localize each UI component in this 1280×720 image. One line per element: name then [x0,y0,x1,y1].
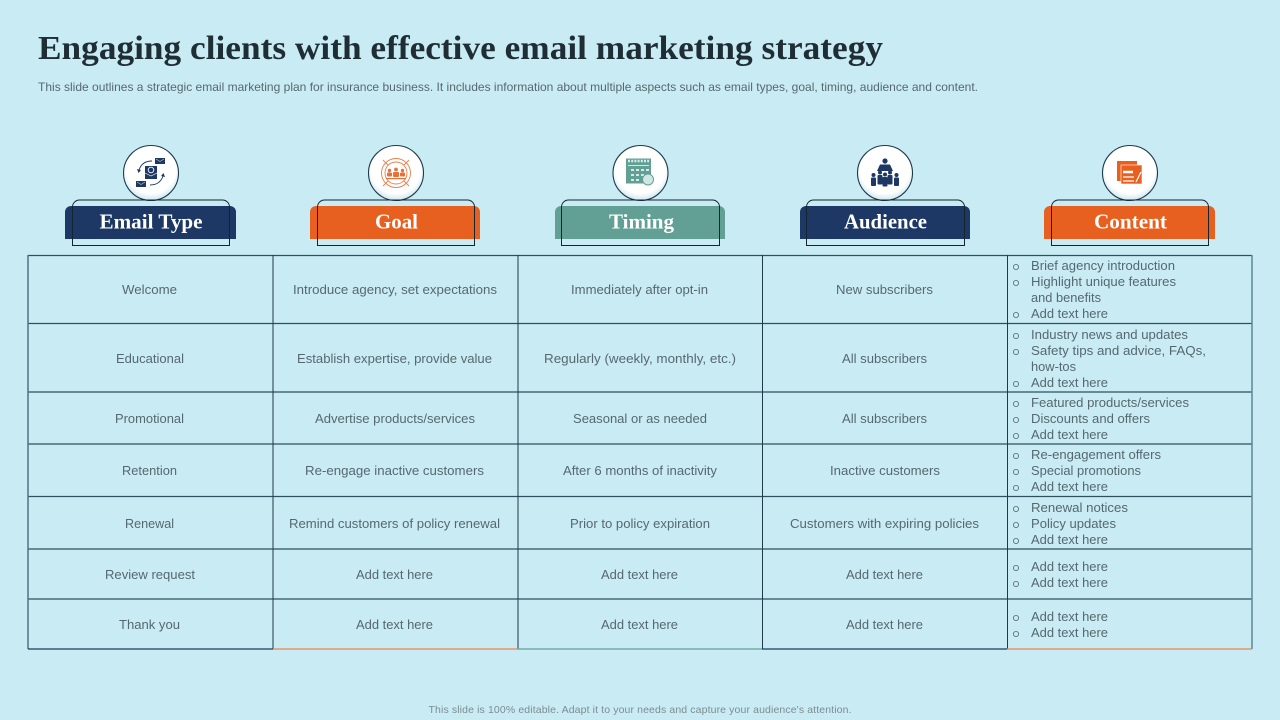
footer note: This slide is 100% editable. Adapt it to your needs and capture your audience's attention. [428,704,852,716]
icon: documents [1102,146,1158,200]
header: Goal [310,146,480,246]
row: Educational: Industry news and updates [1031,327,1188,342]
row: Review request: Review request [105,567,195,582]
header: Goal: Goal [375,210,418,234]
label pill [1044,206,1215,239]
row: Thank you: Add text here [1031,609,1108,624]
row: Renewal: Renewal [125,516,174,531]
header: Email Type: Email Type [100,210,202,234]
header: Audience: Audience [844,210,927,234]
row: Renewal [125,500,1129,547]
row: Welcome: Brief agency introduction [1031,258,1175,273]
row: Promotional [115,395,1190,442]
row: Educational [116,327,1206,390]
header: Timing: Timing [609,210,675,234]
row: Promotional: Discounts and offers [1031,411,1150,426]
row: Promotional: Promotional [115,411,184,426]
row: Renewal: Policy updates [1031,516,1116,531]
row: Promotional: All subscribers [842,411,927,426]
title: Engaging clients with effective email marketing strategy [38,30,883,67]
icon: calendar [613,146,668,200]
row: Welcome [122,258,1176,321]
row: Retention: Inactive customers [830,463,941,478]
row: Promotional: Add text here [1031,427,1108,442]
row: Retention [122,447,1161,494]
icon: email cycle [124,146,178,200]
header: Content: Content [1094,210,1167,234]
row: Educational: how-tos [1031,359,1076,374]
row: Welcome: Add text here [1031,306,1108,321]
header: Content [1044,146,1215,246]
row: Promotional: Advertise products/services [315,411,476,426]
row: Review request: Add text here [846,567,923,582]
row: Educational: Add text here [1031,375,1108,390]
label pill [65,206,236,239]
row: Promotional: Featured products/services [1031,395,1190,410]
row: Welcome: Introduce agency, set expectations [293,282,497,297]
row: Retention: Add text here [1031,479,1108,494]
row: Retention: Re-engagement offers [1031,447,1161,462]
row: Educational: All subscribers [842,351,927,366]
row: Retention: Re-engage inactive customers [305,463,485,478]
row: Retention: Retention [122,463,177,478]
row: Review request: Add text here [356,567,433,582]
row: Review request: Add text here [1031,575,1108,590]
row: Thank you: Add text here [846,617,923,632]
row: Educational: Establish expertise, provide value [297,351,492,366]
row: Review request [105,559,1108,590]
icon: target audience [368,146,424,200]
row: Renewal: Renewal notices [1031,500,1129,515]
row: Review request: Add text here [601,567,678,582]
row: Renewal: Add text here [1031,532,1108,547]
row: Welcome: and benefits [1031,290,1101,305]
header: Timing [555,146,725,246]
header: Audience [800,146,970,246]
row: Retention: Special promotions [1031,463,1141,478]
row: Thank you: Thank you [119,617,180,632]
row: Renewal: Prior to policy expiration [570,516,710,531]
row: Promotional: Seasonal or as needed [573,411,707,426]
icon: people [858,146,912,200]
row: Educational: Regularly (weekly, monthly, etc.) [544,351,736,366]
table grid [28,255,1252,649]
row: Welcome: New subscribers [836,282,933,297]
label pill [555,206,725,239]
label pill [310,206,480,239]
row: Thank you: Add text here [356,617,433,632]
row: Educational: Educational [116,351,184,366]
row: Welcome: Highlight unique features [1031,274,1176,289]
row: Welcome: Welcome [122,282,177,297]
row: Welcome: Immediately after opt-in [571,282,708,297]
subtitle: This slide outlines a strategic email marketing plan for insurance business. It includes information about multiple aspects such as email types, goal, timing, audience and content. [38,80,978,94]
row: Renewal: Remind customers of policy renewal [289,516,500,531]
row: Review request: Add text here [1031,559,1108,574]
row: Retention: After 6 months of inactivity [563,463,718,478]
row: Thank you [119,609,1108,640]
row: Renewal: Customers with expiring policies [790,516,980,531]
row: Educational: Safety tips and advice, FAQs, [1031,343,1206,358]
label pill [800,206,970,239]
row: Thank you: Add text here [1031,625,1108,640]
row: Thank you: Add text here [601,617,678,632]
header: Email Type [65,146,236,246]
